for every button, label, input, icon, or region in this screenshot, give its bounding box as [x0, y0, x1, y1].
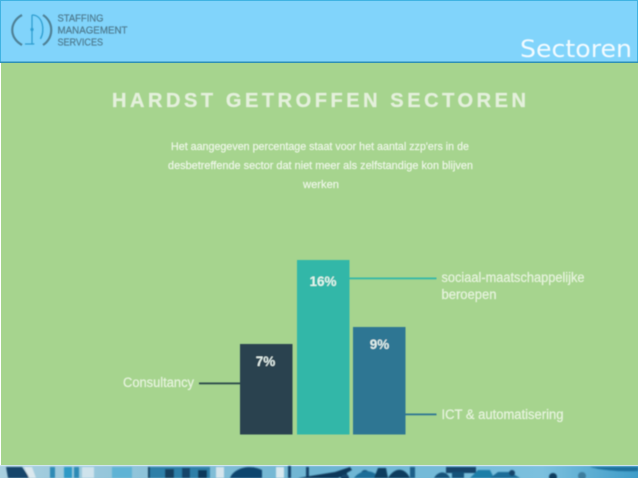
intro text: Het aangegeven percentage staat voor het aantal zzp'ers in de — [171, 141, 469, 153]
intro text — [168, 141, 473, 191]
label: Consultancy: Consultancy — [123, 375, 194, 390]
bar: ICT & automatisering 9% — [353, 327, 406, 434]
bar: ICT & automatisering 9%: 9% — [370, 337, 389, 352]
logo wordmark: MANAGEMENT — [58, 24, 128, 36]
intro text: desbetreffende sector dat niet meer als zelfstandige kon blijven — [168, 160, 473, 172]
label: sociaal-maatschappelijke beroepen: sociaal-maatschappelijke — [442, 270, 584, 285]
bar: sociaal-maatschappelijke beroepen 16% — [297, 260, 350, 434]
bar chart — [123, 260, 584, 434]
header band — [0, 0, 638, 63]
label: sociaal-maatschappelijke beroepen — [350, 270, 584, 302]
logo wordmark: SERVICES — [58, 36, 103, 48]
logo wordmark — [58, 12, 128, 48]
bar: sociaal-maatschappelijke beroepen 16%: 16% — [309, 274, 337, 289]
logo wordmark: STAFFING — [58, 12, 104, 24]
label: ICT & automatisering: ICT & automatisering — [442, 407, 564, 422]
bottom photo strip — [0, 465, 638, 478]
logo icon — [12, 15, 51, 45]
slide title: Sectoren — [520, 35, 632, 63]
bar: Consultancy 7% — [240, 344, 292, 434]
heading: HARDST GETROFFEN SECTOREN — [112, 90, 526, 112]
label: sociaal-maatschappelijke beroepen: beroepen — [442, 287, 496, 302]
label: Consultancy — [123, 375, 240, 390]
bar: Consultancy 7%: 7% — [256, 354, 275, 369]
intro text: werken — [302, 179, 339, 191]
